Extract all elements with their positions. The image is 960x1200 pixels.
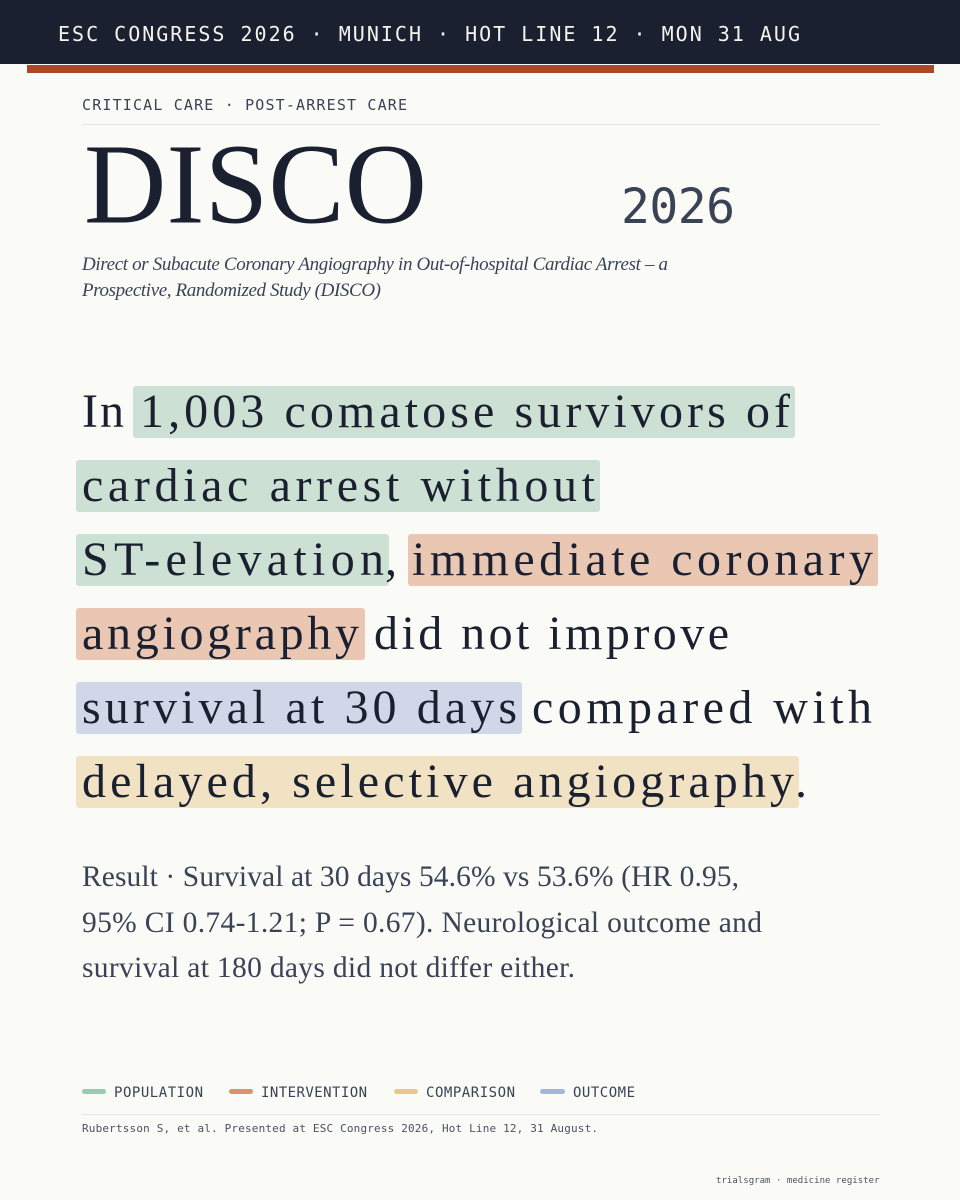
legend [82,1085,635,1101]
headline text: In [82,385,124,438]
subtitle: Direct or Subacute Coronary Angiography in Out-of-hospital Cardiac Arrest – a [81,254,668,275]
result text [82,861,762,984]
accent bar [27,65,934,73]
outcome highlight [76,682,522,734]
legend: population: POPULATION [114,1085,203,1101]
headline text: . [795,755,807,808]
result text: survival at 180 days did not differ either. [82,952,575,984]
headline text: compared with [532,681,872,734]
legend: intervention: INTERVENTION [261,1085,367,1101]
citation: Rubertsson S, et al. Presented at ESC Congress 2026, Hot Line 12, 31 August. [82,1122,598,1135]
legend: outcome [540,1085,635,1101]
headline text: ST-elevation [82,533,384,586]
header banner [0,0,960,64]
intervention highlight [76,534,878,660]
subtitle [81,254,668,301]
subtitle: Prospective, Randomized Study (DISCO) [81,280,381,301]
comparison highlight [76,756,799,808]
headline text: immediate coronary [412,533,873,586]
legend: outcome: OUTCOME [573,1085,635,1101]
year: 2026 [621,179,735,235]
headline text: survival at 30 days [82,681,517,734]
headline text: , [385,533,397,586]
headline text: did not improve [374,607,729,660]
headline PICO sentence [76,385,878,808]
header banner: ESC CONGRESS 2026 · MUNICH · HOT LINE 12 · MON 31 AUG [58,22,800,46]
result text: Result · Survival at 30 days 54.6% vs 53.6% (HR 0.95, [82,861,739,893]
population highlight [76,386,795,586]
result text: 95% CI 0.74-1.21; P = 0.67). Neurological outcome and [82,907,762,939]
legend: comparison: COMPARISON [426,1085,515,1101]
title: DISCO [84,120,427,248]
headline text: delayed, selective angiography [82,755,794,808]
headline text [82,385,873,808]
kicker: CRITICAL CARE · POST-ARREST CARE [82,96,407,114]
credit: trialsgram · medicine register [716,1176,880,1186]
headline text: 1,003 comatose survivors of [140,385,790,438]
headline text: angiography [82,607,359,660]
headline text: cardiac arrest without [82,459,596,512]
